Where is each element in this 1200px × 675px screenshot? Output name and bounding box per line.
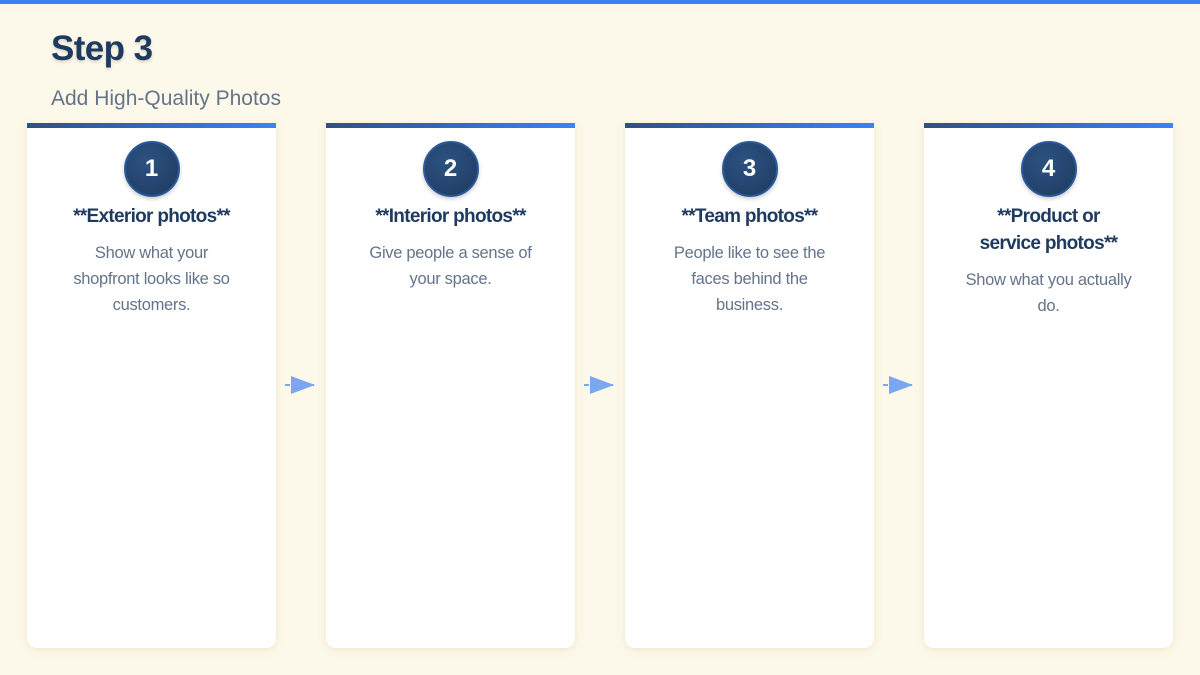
heading: exterior: **Exterior photos**	[73, 206, 230, 227]
text: exterior	[73, 244, 230, 314]
icon: number 2: 2	[444, 155, 457, 182]
panel: step 3	[625, 123, 874, 648]
icon: number 4	[1020, 141, 1076, 197]
icon: number 3: 3	[743, 155, 756, 182]
arrow 2	[584, 376, 614, 394]
heading: team: **Team photos**	[682, 206, 817, 227]
icon: number 2	[422, 141, 478, 197]
text: team: People like to see the faces behind the business.	[674, 244, 825, 314]
panel: step 4	[924, 123, 1173, 648]
text: exterior: shopfront looks like so customers.	[73, 270, 230, 314]
text: product: Show what you actually do.	[966, 271, 1131, 315]
arrow 1	[285, 376, 315, 394]
text: interior: Give people a sense of your space.	[369, 244, 532, 288]
icon: number 4: 4	[1042, 155, 1055, 182]
icon: number 3	[722, 141, 778, 197]
title: Step 3	[51, 29, 152, 68]
arrow 3	[883, 376, 913, 394]
heading: product: **Product or service photos**	[980, 206, 1117, 254]
subtitle: Add High-Quality Photos	[51, 87, 281, 110]
panel: step 2	[326, 123, 575, 648]
panel: step 1	[27, 123, 276, 648]
text: exterior: Show what your	[95, 244, 208, 262]
icon: number 1	[124, 141, 180, 197]
icon: number 1: 1	[145, 155, 158, 182]
heading: interior: **Interior photos**	[375, 206, 526, 227]
